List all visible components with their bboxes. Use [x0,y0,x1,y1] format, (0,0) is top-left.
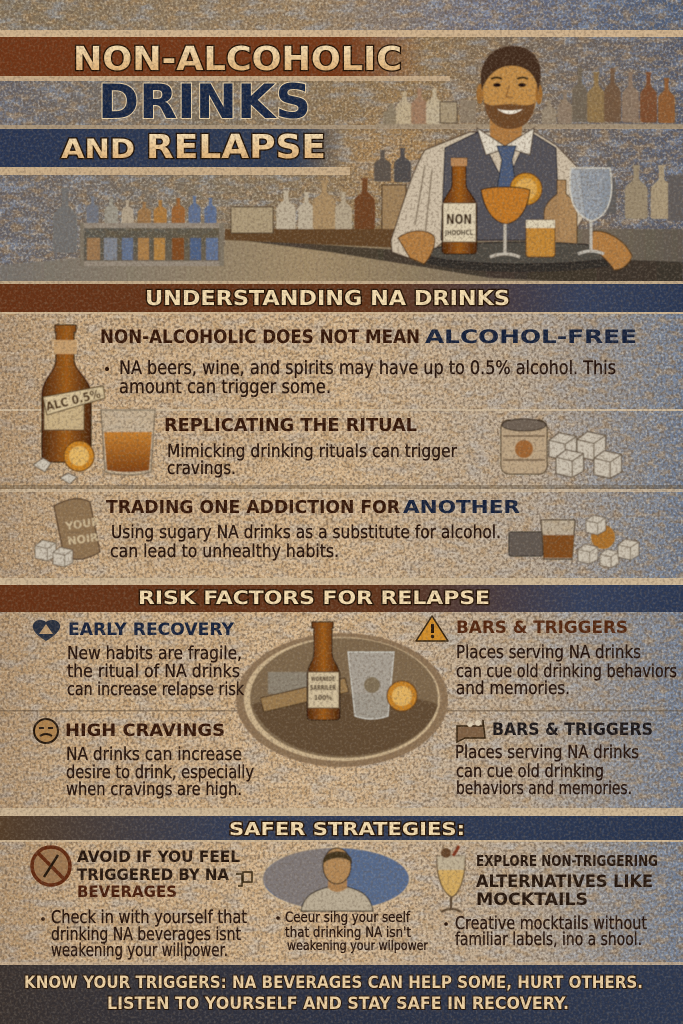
icon: sugary can: YOUR [64,515,101,533]
header banner [0,30,683,175]
text: not alcohol-free: amount can trigger some. [119,376,331,398]
text: replicating the ritual [164,415,458,479]
icon: glass with cubes and fruit [509,515,639,568]
text: replicating the ritual: REPLICATING THE RITUAL [164,415,417,436]
risk: early recovery: New habits are fragile, [67,643,242,664]
icon: sad face [34,719,58,743]
strategy: avoid if triggered: AVOID IF YOU FEEL [77,847,240,866]
wine glass [570,168,612,221]
title: NON-ALCOHOLIC [73,39,402,78]
risk: high cravings [34,719,254,800]
icon: heart [33,620,60,641]
risk: high cravings: desire to drink, especially [66,762,254,783]
illustration: bar shelves and bottles [0,68,683,285]
title: RELAPSE [146,127,326,166]
risk: high cravings: NA drinks can increase [66,744,242,765]
rust title band [0,37,425,76]
risk: early recovery: EARLY RECOVERY [68,620,235,640]
risk: early recovery [33,620,244,700]
text: trading one addiction: ANOTHER [403,497,520,518]
head [483,64,537,128]
text: trading one addiction [106,497,520,562]
illustration: smiling bartender with tray: NON [446,213,472,228]
back bar counter [0,229,683,285]
text: trading one addiction: Using sugary NA drinks as a substitute for alcohol. [111,522,501,543]
risk: bars and triggers one: and memories. [456,678,570,699]
risk: bars and triggers two [455,720,653,799]
strategy: avoid if triggered: drinking NA beverages isnt [51,924,241,945]
hair [481,46,541,92]
panel: footer message: LISTEN TO YOURSELF AND STAY SAFE IN RECOVERY. [107,994,569,1014]
section heading band [0,816,683,840]
text: trading one addiction: TRADING ONE ADDICTION FOR [106,497,400,518]
center oval illustration: 100% [314,694,332,702]
illustration: smiling bartender with tray [391,46,632,272]
center oval illustration [236,622,448,767]
risk: bars and triggers one [416,616,677,699]
icon: can with ice cubes [501,419,622,478]
risk: early recovery: can increase relapse risk [67,679,244,700]
icon: ALC beer bottle and glass: ALC 0.5% [44,387,102,414]
portrait oval [260,846,412,912]
section heading band: UNDERSTANDING NA DRINKS [145,286,510,310]
section heading band [0,284,683,312]
beard [484,102,535,129]
strategy: avoid if triggered [32,847,252,961]
panel: risk factors for relapse [0,585,683,800]
tie [495,146,518,215]
strategy: avoid if triggered: BEVERAGES [77,882,177,901]
cocktail glass [481,173,542,257]
risk: high cravings: HIGH CRAVINGS [65,721,225,741]
strategy: person portrait [260,846,429,954]
section heading band: RISK FACTORS FOR RELAPSE [138,587,490,609]
center oval illustration: WORNEDE [311,676,335,683]
icon: bar sign [457,720,485,742]
text: replicating the ritual: Mimicking drinking rituals can trigger [167,441,458,462]
title: DRINKS [98,75,311,130]
title [61,39,402,166]
vest [441,132,560,240]
strategy: explore mocktails [437,846,658,950]
risk: bars and triggers one: BARS & TRIGGERS [456,618,628,638]
navy title band [0,129,345,167]
hands [398,231,435,264]
illustration: smiling bartender with tray: JHOOHCL [444,229,473,237]
shirt [391,132,585,262]
NON bottle [442,158,477,254]
text: trading one addiction: can lead to unhealthy habits. [110,541,339,562]
section heading band: SAFER STRATEGIES: [229,819,465,840]
strategy: explore mocktails: ALTERNATIVES LIKE [476,872,653,892]
section heading band [0,585,683,612]
small glass [526,220,555,257]
risk: bars and triggers one: Places serving NA drinks [456,642,641,663]
risk: bars and triggers two: behaviors and memories. [456,778,632,799]
strategy: avoid if triggered: Check in with yourself that [51,907,247,928]
risk: early recovery: the ritual of NA drinks [67,661,240,682]
eyes [493,83,501,87]
tray [420,244,626,272]
icon: sugary can [35,499,101,567]
strategy: explore mocktails: MOCKTAILS [476,890,588,910]
strategy: person portrait: that drinking NA isn't [285,925,411,941]
icon: warning triangle [416,616,448,641]
risk: bars and triggers two: BARS & TRIGGERS [492,720,653,740]
icon: mocktail glass [437,846,465,912]
icon: prohibited bottle [32,847,70,885]
strategy: avoid if triggered: weakening your willpower. [51,940,228,961]
text: replicating the ritual: cravings. [167,458,236,479]
strategy: person portrait: Ceeur sihg your seelf [285,910,411,926]
risk: bars and triggers two: Places serving NA drinks [455,742,639,763]
icon: sugary can: NOIR [67,531,100,548]
icon: small note [236,872,252,886]
bottle rack [80,196,224,266]
panel: footer message [0,962,683,1024]
neck and collar [490,116,522,154]
icon: ALC beer bottle and glass [33,325,155,484]
strategy: person portrait: weakening your wilpower [287,939,429,954]
panel: understanding NA drinks [0,284,683,568]
strategy: avoid if triggered: TRIGGERED BY NA [77,865,230,884]
title: AND [61,134,135,165]
risk: high cravings: when cravings are high. [66,779,242,800]
text: not alcohol-free: ALCOHOL-FREE [425,326,637,348]
center oval illustration: SARRILER [310,684,336,692]
panel: safer strategies [0,816,683,961]
text: not alcohol-free [100,326,637,398]
background bottle on tray [544,180,577,250]
risk: bars and triggers two: can cue old drinking [456,761,604,782]
text: not alcohol-free: NON-ALCOHOLIC DOES NOT MEAN [100,326,420,348]
